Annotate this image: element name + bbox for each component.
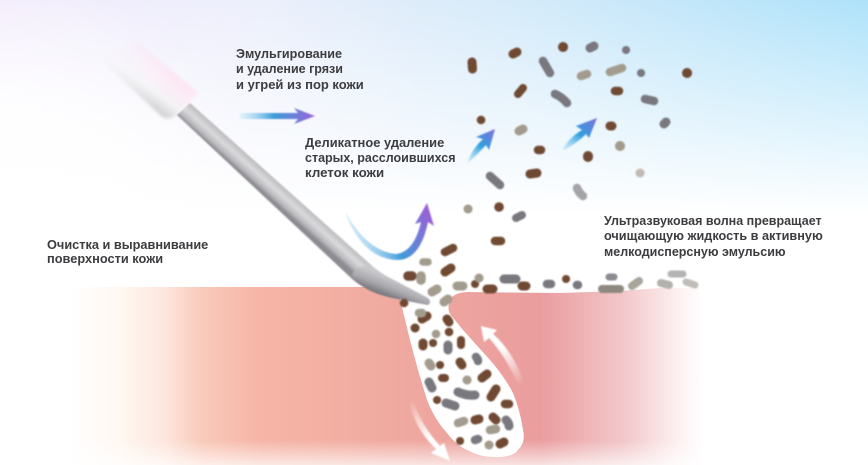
text: exfoliation: Деликатное удаление: [305, 135, 444, 150]
debris particles brown: [404, 47, 687, 444]
text: ultrasonic wave: мелкодисперсную эмульсию: [604, 245, 786, 259]
arrow: horizontal gradient: [240, 108, 315, 124]
text: ultrasonic wave: очищающую жидкость в активную: [604, 229, 823, 243]
text: ultrasonic wave: [604, 214, 823, 259]
text: emulsification: и угрей из пор кожи: [236, 77, 364, 92]
text: exfoliation: клеток кожи: [305, 165, 384, 180]
text: emulsification: Эмульгирование: [236, 47, 342, 61]
text: emulsification: и удаление грязи: [236, 62, 343, 76]
text: emulsification: [236, 47, 364, 92]
text: surface cleansing: поверхности кожи: [47, 251, 163, 266]
arrow: diagonal up left: [467, 129, 495, 164]
text: surface cleansing: [47, 237, 208, 266]
debris particles tan: [419, 68, 640, 445]
spatula blade: [177, 103, 430, 305]
arrow: curved up: [345, 203, 434, 260]
debris particles on skin surface: [602, 274, 695, 289]
text: exfoliation: [305, 135, 456, 180]
skin cross-section with pore: [70, 287, 710, 465]
debris particles grey: [429, 46, 666, 440]
handpiece handle: [121, 55, 197, 120]
text: surface cleansing: Очистка и выравнивание: [47, 237, 208, 252]
white flow arrow: up the pore: [481, 326, 525, 386]
particles: rising debris: [404, 46, 695, 445]
arrow: diagonal up right: [562, 118, 597, 151]
text: ultrasonic wave: Ультразвуковая волна превращает: [604, 214, 822, 228]
text: exfoliation: старых, расслоившихся: [305, 151, 456, 165]
white flow arrow: down the pore: [409, 400, 450, 461]
